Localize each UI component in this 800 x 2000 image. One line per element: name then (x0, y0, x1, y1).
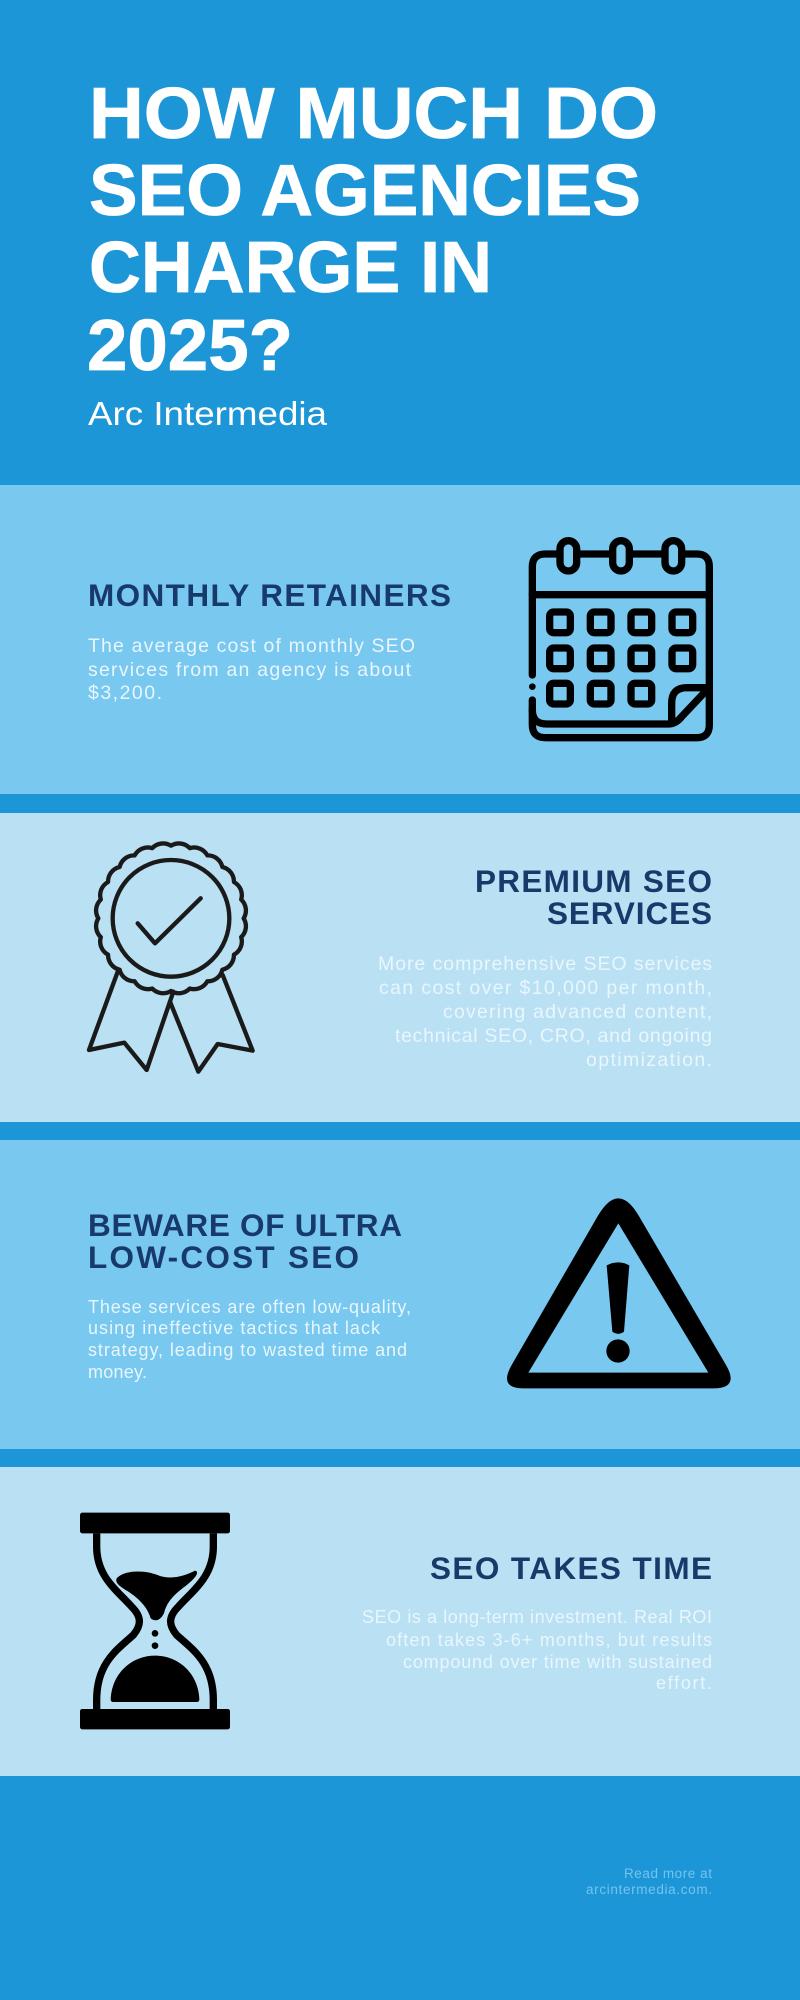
text: SEO takes time: SEO is a long-term investment. Real ROI (362, 1607, 712, 1627)
icon: warning triangle (507, 1198, 731, 1388)
footer note: arcintermedia.com. (586, 1882, 712, 1897)
text: premium SEO services: More comprehensive SEO services (378, 953, 712, 975)
text: SEO takes time: compound over time with sustained (403, 1652, 712, 1672)
heading: beware of ultra low-cost SEO (88, 1207, 402, 1275)
text: SEO takes time (362, 1607, 712, 1693)
text: premium SEO services: optimization. (586, 1049, 712, 1071)
text: beware of ultra low-cost SEO (88, 1297, 411, 1382)
title: SEO AGENCIES (89, 151, 641, 231)
heading: premium SEO services: SERVICES (547, 895, 712, 931)
heading: monthly retainers: MONTHLY RETAINERS (88, 577, 451, 613)
subtitle: Arc Intermedia (88, 396, 327, 433)
text: monthly retainers (88, 635, 415, 704)
text: monthly retainers: services from an agency is about (88, 659, 412, 681)
footer note (586, 1866, 712, 1897)
text: monthly retainers: The average cost of monthly SEO (88, 635, 415, 657)
panel: premium SEO services (0, 813, 800, 1122)
panel: beware of ultra low-cost SEO (0, 1140, 800, 1449)
heading: beware of ultra low-cost SEO: LOW-COST SEO (88, 1239, 359, 1275)
heading: premium SEO services: PREMIUM SEO (475, 863, 712, 899)
icon: award badge (89, 843, 253, 1072)
title (87, 74, 658, 386)
title: HOW MUCH DO (89, 74, 658, 154)
text: monthly retainers: $3,200. (88, 682, 162, 704)
icon: calendar (530, 541, 709, 738)
text: beware of ultra low-cost SEO: using ineffective tactics that lack (88, 1318, 381, 1338)
text: premium SEO services: can cost over $10,000 per month, (379, 977, 712, 999)
footer note: Read more at (624, 1866, 712, 1881)
text: SEO takes time: effort. (656, 1673, 712, 1693)
heading: premium SEO services (475, 863, 712, 931)
text: beware of ultra low-cost SEO: These services are often low-quality, (88, 1297, 411, 1317)
panel: monthly retainers (0, 485, 800, 794)
icon: hourglass (80, 1513, 230, 1729)
heading: SEO takes time: SEO TAKES TIME (430, 1550, 712, 1586)
title: CHARGE IN (89, 228, 492, 308)
panel: SEO takes time (0, 1467, 800, 1776)
text: beware of ultra low-cost SEO: money. (88, 1362, 147, 1382)
text: beware of ultra low-cost SEO: strategy, leading to wasted time and (88, 1340, 407, 1360)
text: SEO takes time: often takes 3-6+ months, but results (386, 1630, 712, 1650)
title: 2025? (87, 306, 293, 386)
text: premium SEO services: covering advanced content, (443, 1001, 712, 1023)
heading: beware of ultra low-cost SEO: BEWARE OF ULTRA (88, 1207, 402, 1243)
text: premium SEO services: technical SEO, CRO, and ongoing (395, 1025, 712, 1047)
text: premium SEO services (378, 953, 712, 1071)
